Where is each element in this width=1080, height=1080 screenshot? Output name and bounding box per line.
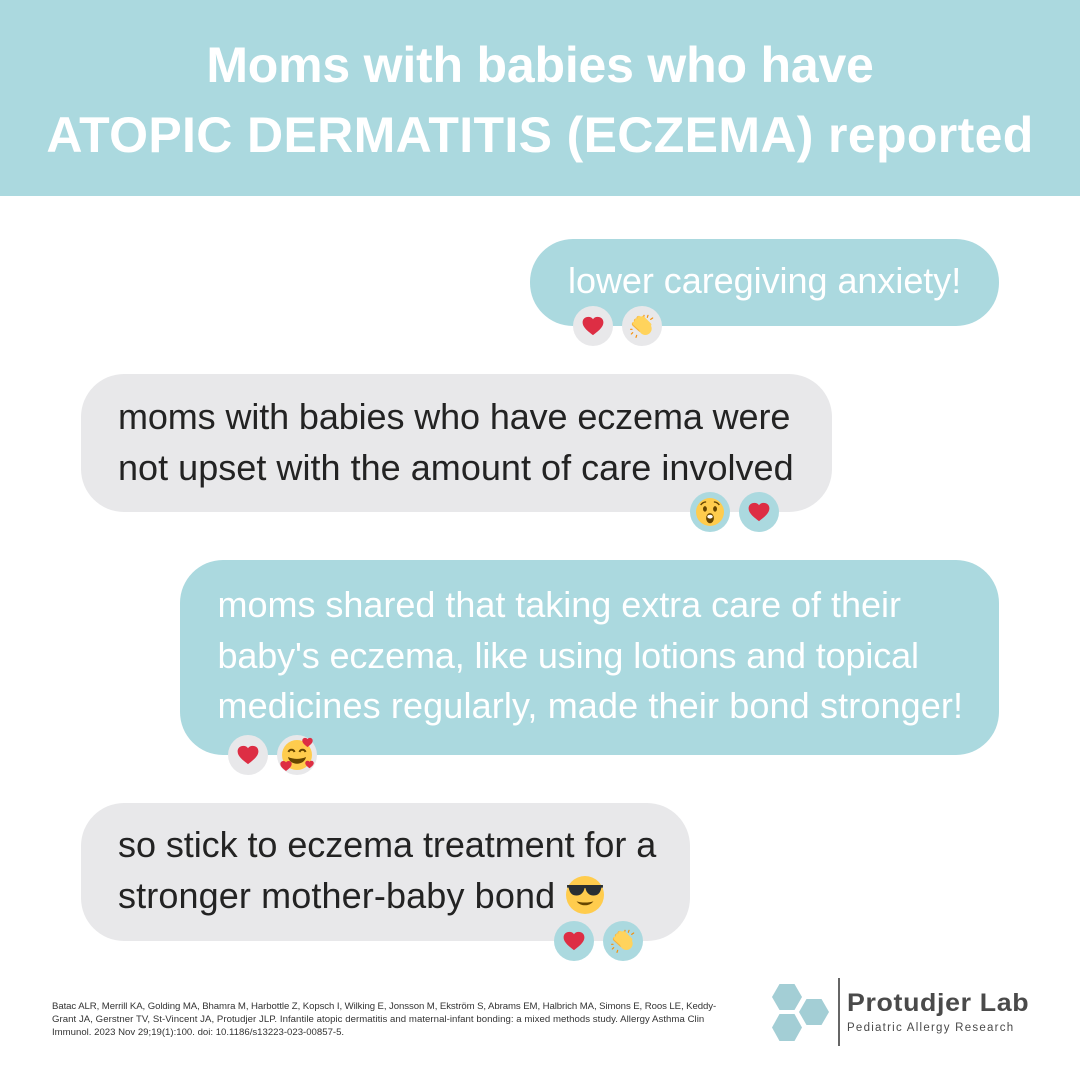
message bubble: stick to treatment: so stick to eczema treatment for a bbox=[118, 824, 656, 865]
logo divider bbox=[838, 978, 840, 1046]
reaction: heart bbox=[228, 735, 268, 775]
message bubble: lower caregiving anxiety bbox=[530, 239, 999, 326]
message bubble: stronger bond: baby's eczema, like using lotions and topical bbox=[218, 635, 919, 676]
message bubble: not upset with care: moms with babies who have eczema were bbox=[118, 396, 790, 437]
citation bbox=[52, 1001, 716, 1038]
logo name: Protudjer Lab bbox=[847, 989, 1029, 1017]
message bubble: stick to treatment bbox=[81, 803, 690, 941]
message bubble: lower caregiving anxiety: lower caregiving anxiety! bbox=[568, 260, 961, 301]
message bubble: stronger bond: medicines regularly, made their bond stronger! bbox=[218, 685, 963, 726]
header banner bbox=[0, 0, 1080, 196]
reaction: heart bbox=[739, 492, 779, 532]
reaction: smiling face with hearts bbox=[277, 735, 317, 775]
citation: Grant JA, Gerstner TV, St-Vincent JA, Protudjer JLP. Infantile atopic dermatitis and maternal-infant bonding: a mixed methods study. Allergy Asthma Clin bbox=[52, 1014, 704, 1025]
citation: Batac ALR, Merrill KA, Golding MA, Bhamra M, Harbottle Z, Kopsch I, Wilking E, Jonsson M, Ekström S, Abrams EM, Halbrich MA, Simons E, Roos LE, Keddy- bbox=[52, 1001, 716, 1012]
title: Moms with babies who have bbox=[206, 37, 874, 93]
message bubble: stick to treatment: stronger mother-baby bond bbox=[118, 875, 555, 916]
logo: Protudjer Lab bbox=[772, 978, 1029, 1046]
logo hexagons bbox=[772, 984, 829, 1041]
reaction: shocked face bbox=[690, 492, 730, 532]
reaction: clapping hands bbox=[622, 306, 662, 346]
icon: sunglasses emoji bbox=[566, 876, 604, 914]
message bubble: stronger bond: moms shared that taking extra care of their bbox=[218, 584, 901, 625]
message bubble: stronger bond bbox=[180, 560, 999, 755]
logo tagline: Pediatric Allergy Research bbox=[847, 1022, 1014, 1034]
reaction: heart bbox=[554, 921, 594, 961]
reaction: clapping hands bbox=[603, 921, 643, 961]
reaction: heart bbox=[573, 306, 613, 346]
title bbox=[46, 37, 1034, 163]
message bubble: not upset with care bbox=[81, 374, 832, 512]
message bubble: not upset with care: not upset with the amount of care involved bbox=[118, 447, 794, 488]
citation: Immunol. 2023 Nov 29;19(1):100. doi: 10.1186/s13223-023-00857-5. bbox=[52, 1027, 344, 1038]
title: ATOPIC DERMATITIS (ECZEMA) reported bbox=[46, 107, 1034, 163]
